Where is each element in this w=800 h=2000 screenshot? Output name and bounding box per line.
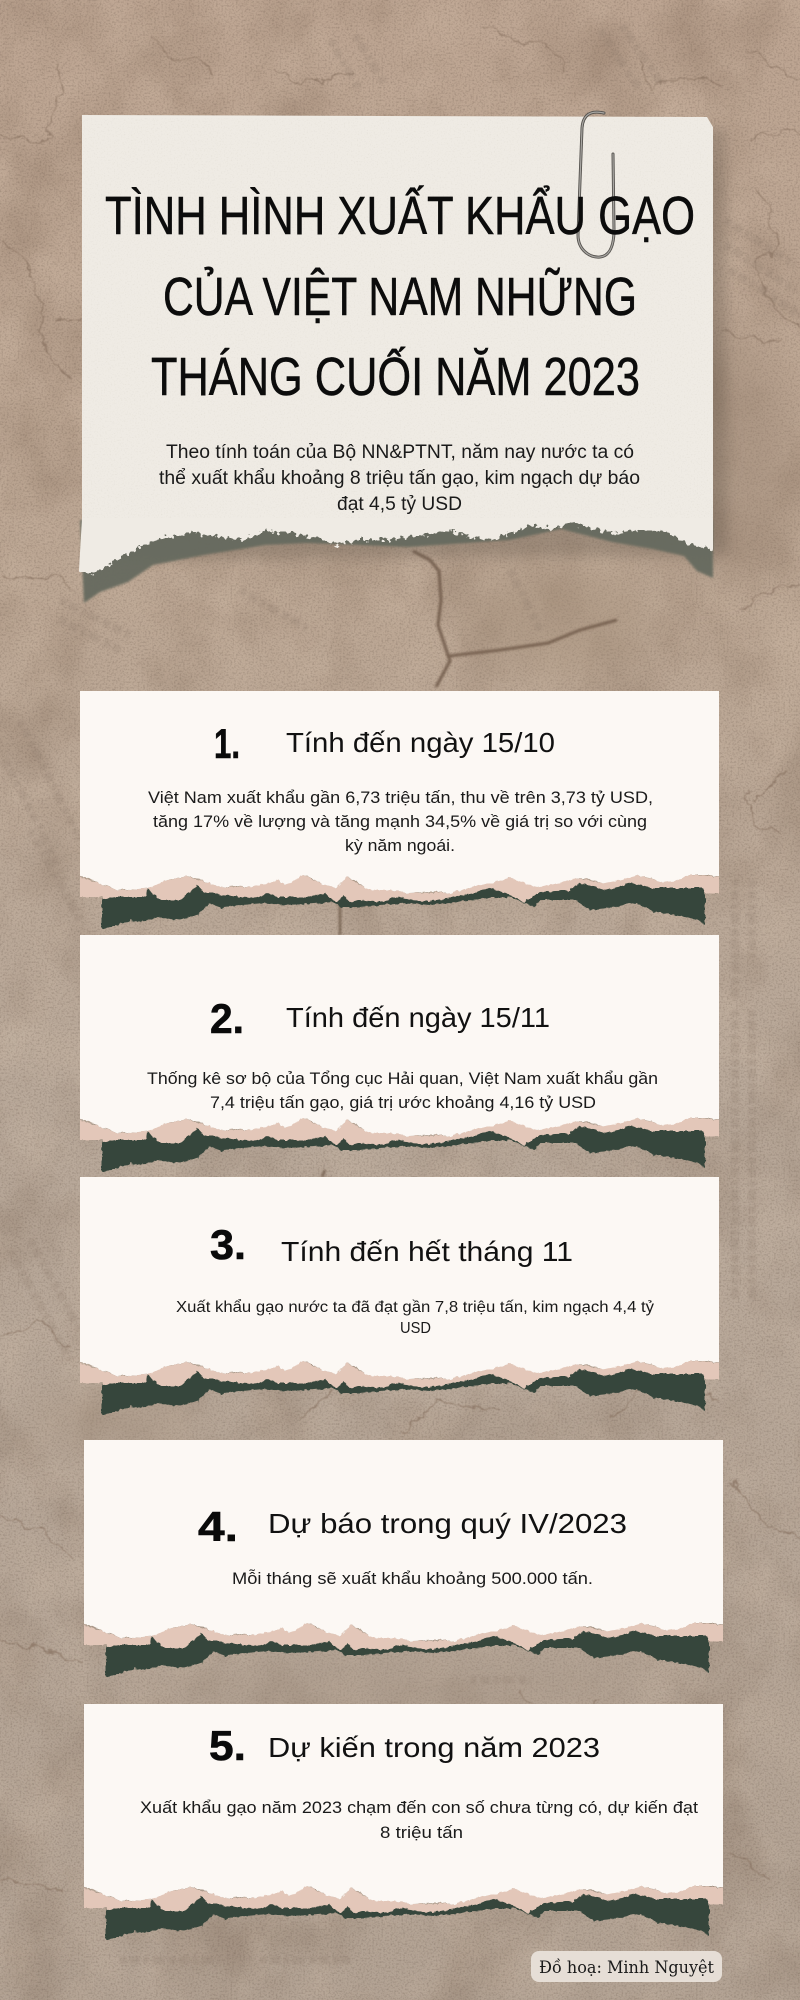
body 5: Xuất khẩu gạo năm 2023 chạm đến con số chưa từng có, dự kiến đạt	[140, 1798, 698, 1817]
intro text: thể xuất khẩu khoảng 8 triệu tấn gạo, kim ngạch dự báo	[159, 468, 640, 489]
icon: paper clip	[578, 112, 614, 257]
panel: card 5	[79, 1704, 728, 1940]
panel: card 3	[75, 1177, 724, 1415]
heading 2: Tính đến ngày 15/11	[286, 1002, 550, 1033]
heading 3: Tính đến hết tháng 11	[281, 1236, 573, 1267]
hero shadow	[80, 125, 727, 603]
number 1: 1.	[214, 720, 240, 767]
intro text: Theo tính toán của Bộ NN&PTNT, năm nay nước ta có	[166, 442, 634, 463]
panel: card 1	[75, 691, 724, 929]
number 2: 2.	[210, 995, 244, 1042]
heading 1: Tính đến ngày 15/10	[286, 727, 555, 758]
body 5	[140, 1798, 698, 1842]
number 3: 3.	[210, 1221, 246, 1268]
panel: card 4	[79, 1440, 728, 1677]
credit badge	[531, 1951, 722, 1982]
body 1: kỳ năm ngoái.	[345, 836, 455, 855]
body 2	[147, 1069, 658, 1112]
body 1: Việt Nam xuất khẩu gần 6,73 triệu tấn, thu về trên 3,73 tỷ USD,	[148, 788, 653, 807]
number 5: 5.	[209, 1722, 246, 1769]
heading 5: Dự kiến trong năm 2023	[268, 1732, 600, 1763]
hero paper sheet	[70, 115, 725, 574]
panel: card 2	[75, 935, 724, 1172]
body 1: tăng 17% về lượng và tăng mạnh 34,5% về giá trị so với cùng	[153, 812, 647, 831]
body 3: Xuất khẩu gạo nước ta đã đạt gần 7,8 triệu tấn, kim ngạch 4,4 tỷ	[176, 1299, 654, 1316]
number 4: 4.	[198, 1503, 238, 1550]
body 2: Thống kê sơ bộ của Tổng cục Hải quan, Việt Nam xuất khẩu gần	[147, 1069, 658, 1088]
body 3: USD	[400, 1320, 431, 1337]
body 1	[148, 788, 653, 855]
title: THÁNG CUỐI NĂM 2023	[151, 347, 640, 407]
body 4: Mỗi tháng sẽ xuất khẩu khoảng 500.000 tấn.	[232, 1569, 593, 1588]
title: CỦA VIỆT NAM NHỮNG	[163, 267, 637, 327]
credit badge: Đồ hoạ: Minh Nguyệt	[539, 1958, 714, 1977]
hero: torn paper note	[70, 112, 727, 603]
heading 4: Dự báo trong quý IV/2023	[268, 1508, 627, 1539]
intro text	[159, 442, 640, 515]
title	[105, 186, 695, 407]
body 5: 8 triệu tấn	[380, 1823, 463, 1842]
intro text: đạt 4,5 tỷ USD	[337, 494, 462, 515]
body 3	[176, 1299, 654, 1337]
body 2: 7,4 triệu tấn gạo, giá trị ước khoảng 4,16 tỷ USD	[210, 1093, 596, 1112]
